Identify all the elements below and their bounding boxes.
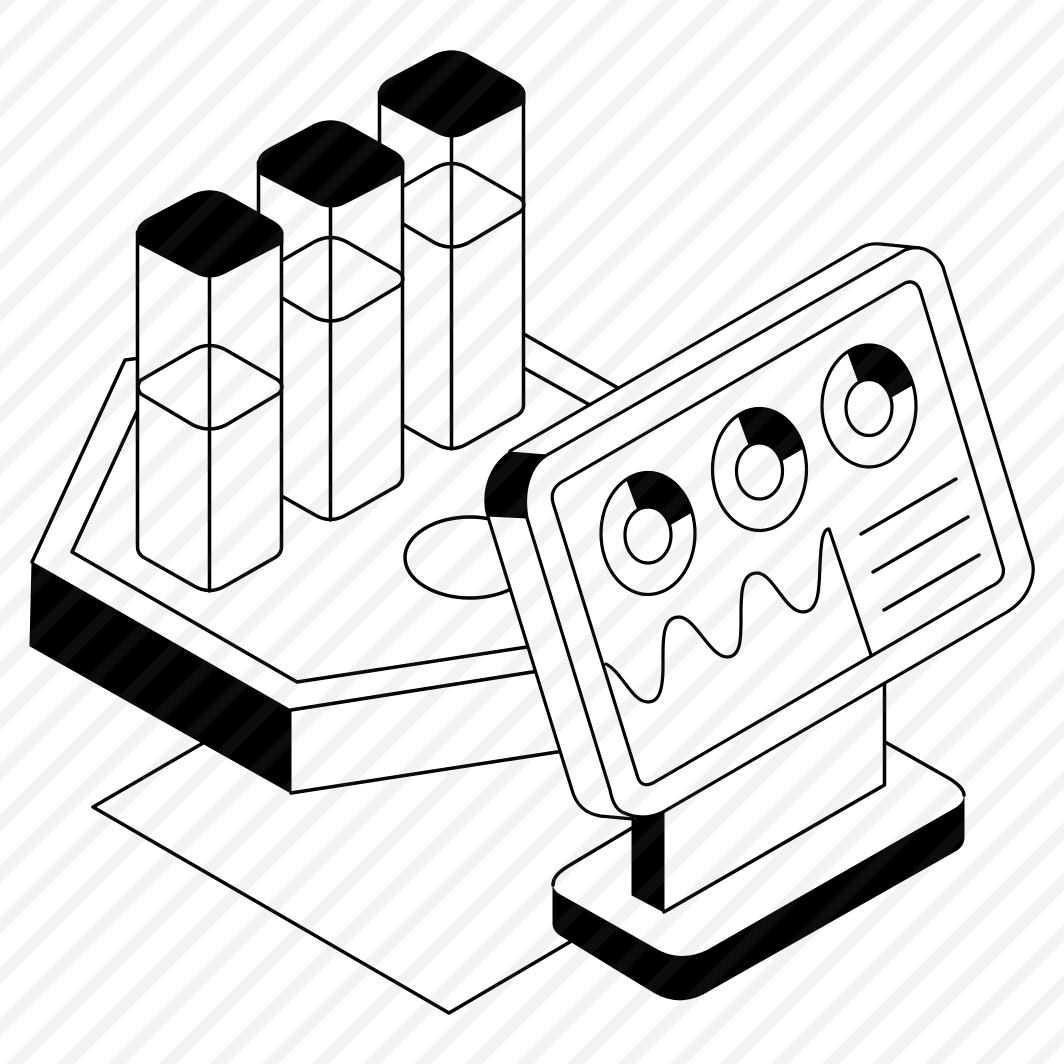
monitor front bezel (526, 248, 1033, 817)
monitor stand (632, 683, 884, 912)
floor sheet (93, 739, 575, 1013)
text lines (861, 479, 979, 610)
monitor screen (552, 282, 1003, 785)
line chart wave (606, 529, 871, 702)
donut chart 1 (601, 472, 695, 594)
platform front black side (30, 562, 291, 793)
column 1 (137, 191, 283, 591)
monitor (485, 244, 1033, 819)
hexagonal platform (30, 329, 618, 793)
monitor base (553, 742, 964, 1000)
donut chart 2 (712, 408, 806, 530)
column 2 (258, 121, 404, 520)
platform right side (291, 670, 570, 793)
monitor back shell (486, 244, 1013, 819)
donut chart 3 (822, 345, 916, 467)
black bezel corner (485, 452, 547, 518)
round marker on platform (405, 517, 535, 598)
column 3 (379, 51, 525, 449)
